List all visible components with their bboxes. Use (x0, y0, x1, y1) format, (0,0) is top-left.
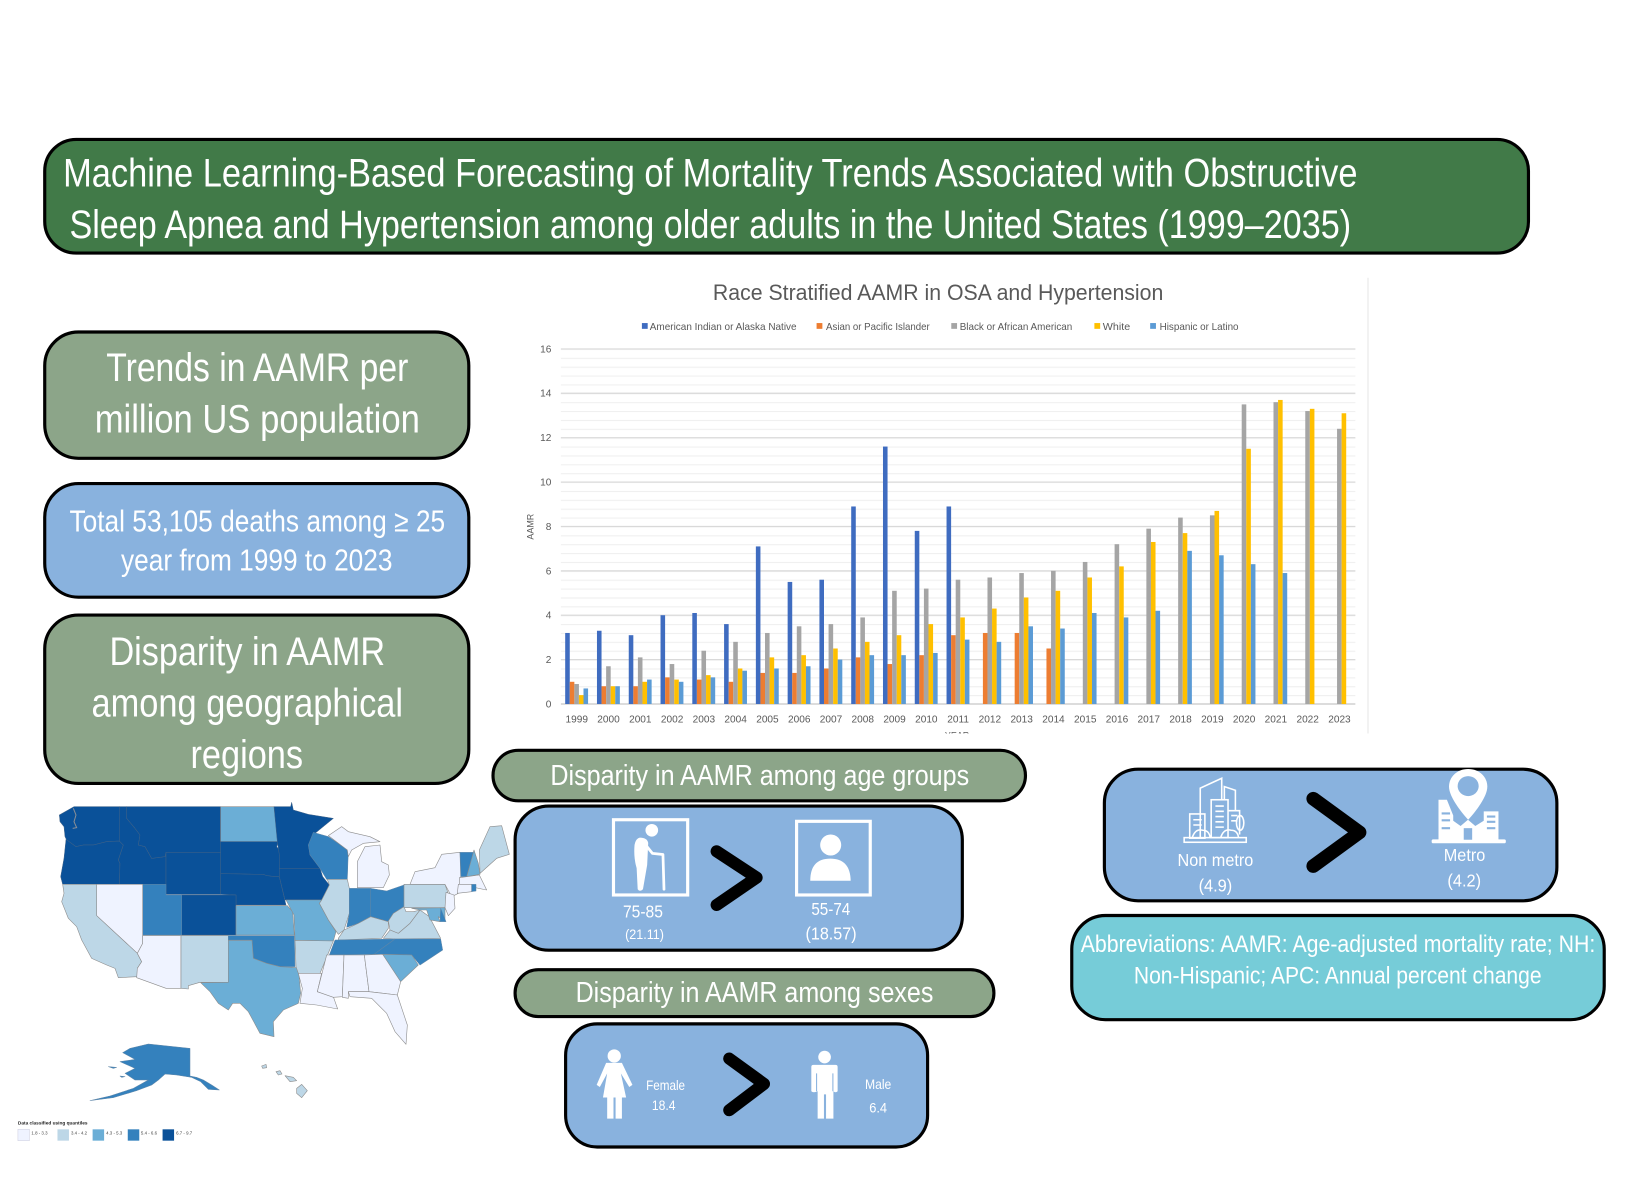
label: 75-85 (623, 902, 664, 942)
icon: male figure (811, 1051, 838, 1119)
icon: metro city with pin (1432, 769, 1506, 843)
x axis labels: 2000 (597, 715, 620, 726)
y axis labels: 8 (546, 522, 552, 533)
choropleth map of the United States (18, 802, 509, 1141)
title banner: Machine Learning-Based Forecasting of Mortality Trends Associated with Obstructive (63, 151, 1357, 195)
x axis labels: 2007 (820, 715, 843, 726)
panel: trends heading: Trends in AAMR per (106, 346, 408, 390)
chart legend (642, 322, 1239, 333)
map legend: 3.4 - 4.2 (71, 1131, 88, 1136)
icon: older adult with cane (613, 820, 688, 895)
x axis labels: 2011 (947, 715, 969, 726)
panel: sexes comparison (566, 1024, 928, 1147)
panel: age groups comparison (515, 806, 962, 950)
panel: total deaths: Total 53,105 deaths among ≥ 25 (69, 504, 445, 538)
panel: geographical disparity heading: regions (190, 733, 303, 777)
label: male (865, 1077, 891, 1115)
icon: adult (797, 821, 870, 895)
panel: total deaths (45, 484, 469, 597)
heading: disparity among age groups (493, 750, 1025, 801)
x axis labels: 2018 (1169, 715, 1192, 726)
label: metro (1444, 845, 1485, 891)
panel: abbreviations: Non-Hispanic; APC: Annual percent change (1134, 962, 1542, 989)
x axis labels: 1999 (566, 715, 588, 726)
x axis labels: 2008 (852, 715, 874, 726)
arrow: greater than (717, 851, 757, 905)
label: 55-74 (806, 899, 857, 944)
y axis labels: 4 (546, 611, 552, 622)
label: non metro: Non metro (1178, 850, 1253, 870)
x axis labels: 2012 (979, 715, 1002, 726)
x axis labels: 2010 (915, 715, 938, 726)
x axis labels: 2015 (1074, 715, 1097, 726)
label: female (646, 1078, 685, 1113)
map legend: Data classified using quantiles (18, 1121, 88, 1126)
x axis labels: 2016 (1106, 715, 1129, 726)
x axis title: YEAR (945, 731, 970, 741)
x axis labels (566, 715, 1351, 726)
Hawaii (262, 1064, 307, 1098)
y axis labels: 2 (546, 655, 552, 666)
title banner: Sleep Apnea and Hypertension among older adults in the United States (1999–2035) (69, 203, 1351, 247)
x axis labels: 2005 (756, 715, 779, 726)
panel: total deaths: year from 1999 to 2023 (121, 543, 393, 577)
chart legend: American Indian or Alaska Native (650, 322, 797, 333)
label: female: Female (646, 1078, 685, 1093)
map legend: 6.7 - 9.7 (176, 1131, 193, 1136)
chart title: Race Stratified AAMR in OSA and Hypertension (713, 280, 1163, 305)
label: metro: Metro (1444, 845, 1485, 865)
label: 55-74: (18.57) (806, 924, 857, 944)
label: male: Male (865, 1077, 891, 1092)
heading: disparity among sexes: Disparity in AAMR among sexes (576, 977, 933, 1009)
label: non metro: (4.9) (1199, 875, 1232, 895)
x axis labels: 2004 (724, 715, 747, 726)
x axis labels: 2002 (661, 715, 684, 726)
panel: abbreviations (1072, 915, 1604, 1020)
label: metro: (4.2) (1447, 871, 1481, 891)
y axis labels: 14 (540, 389, 552, 400)
y axis labels (540, 344, 552, 710)
Alaska (90, 1044, 219, 1101)
western states (59, 807, 301, 1037)
label: male: 6.4 (869, 1100, 887, 1115)
panel: metro comparison (1104, 769, 1557, 901)
map legend: 4.3 - 5.3 (106, 1131, 123, 1136)
chart legend: Black or African American (960, 322, 1072, 333)
x axis labels: 2017 (1138, 715, 1160, 726)
panel: geographical disparity heading: Disparity in AAMR (109, 630, 385, 674)
label: 75-85: 75-85 (623, 902, 663, 922)
heading: disparity among sexes (515, 970, 994, 1017)
x axis labels: 2019 (1201, 715, 1224, 726)
y axis title: AAMR (526, 513, 536, 540)
map legend: 1.8 - 3.3 (31, 1131, 48, 1136)
y axis labels: 16 (540, 344, 552, 355)
bar chart: race stratified AAMR (526, 278, 1369, 741)
x axis labels: 2023 (1328, 715, 1351, 726)
label: non metro (1178, 850, 1253, 895)
map legend: 5.4 - 6.6 (141, 1131, 158, 1136)
x axis labels: 2003 (693, 715, 715, 726)
chart legend: Asian or Pacific Islander (826, 322, 930, 333)
panel: geographical disparity heading: among geographical (92, 682, 403, 726)
y axis labels: 10 (540, 478, 552, 489)
arrow: greater than (729, 1059, 764, 1110)
bars (565, 400, 1346, 704)
icon: female figure (597, 1049, 632, 1119)
y axis labels: 6 (546, 566, 552, 577)
x axis labels: 2020 (1233, 715, 1256, 726)
x axis labels: 2006 (788, 715, 811, 726)
x axis labels: 2013 (1010, 715, 1033, 726)
panel: abbreviations: Abbreviations: AAMR: Age-adjusted mortality rate; NH: (1081, 931, 1595, 958)
x axis labels: 2014 (1042, 715, 1065, 726)
chart legend: White (1103, 322, 1131, 333)
x axis labels: 2001 (629, 715, 652, 726)
y axis labels: 12 (540, 433, 552, 444)
y axis labels: 0 (546, 699, 552, 710)
x axis labels: 2021 (1265, 715, 1288, 726)
label: female: 18.4 (652, 1098, 676, 1113)
title banner (45, 139, 1528, 253)
heading: disparity among age groups: Disparity in AAMR among age groups (550, 760, 969, 792)
label: 75-85: (21.11) (625, 927, 664, 942)
x axis labels: 2022 (1296, 715, 1319, 726)
eastern states (274, 802, 509, 1044)
panel: geographical disparity heading (45, 615, 469, 783)
map legend (18, 1121, 193, 1141)
panel: trends heading (45, 332, 469, 458)
panel: trends heading: million US population (95, 397, 420, 441)
label: 55-74: 55-74 (811, 899, 850, 919)
arrow: greater than (1313, 799, 1360, 866)
chart legend: Hispanic or Latino (1160, 322, 1239, 333)
x axis labels: 2009 (883, 715, 906, 726)
icon: non metro city (1184, 778, 1246, 842)
